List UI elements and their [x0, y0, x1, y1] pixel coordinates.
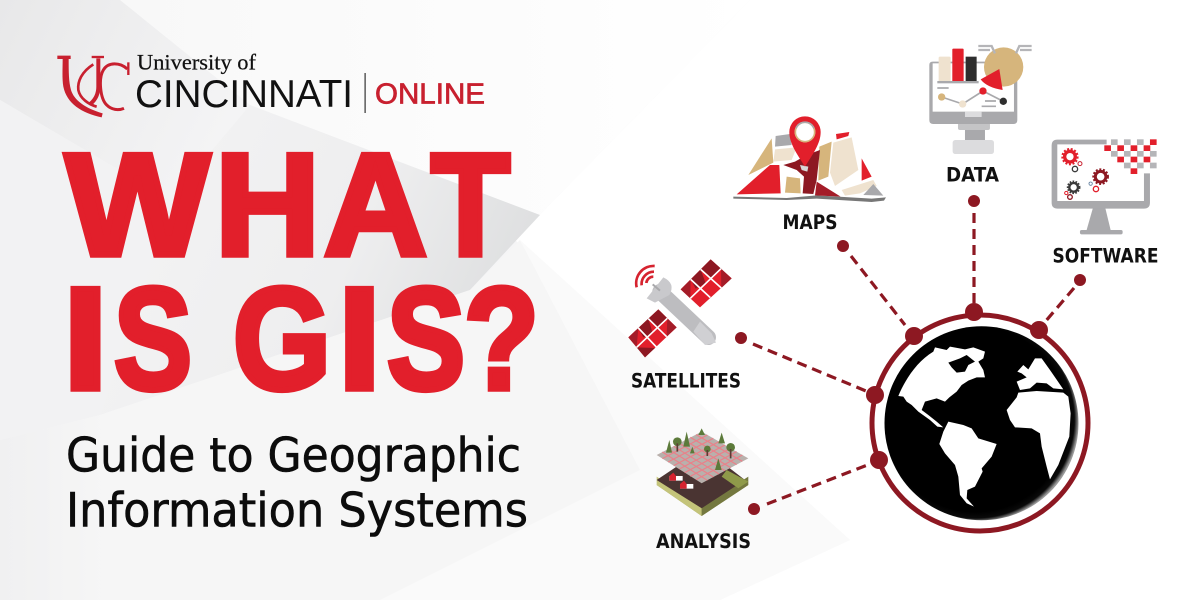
connector end dots: [735, 195, 1086, 515]
bar chart: [939, 57, 951, 82]
label: ANALYSIS: ANALYSIS: [656, 530, 751, 553]
icon: map with pin: [733, 116, 886, 202]
logo divider: [364, 73, 366, 113]
label: DATA: DATA: [946, 164, 999, 187]
orbit ring: [872, 315, 1088, 531]
icon: satellite: [628, 259, 732, 357]
pie chart: [984, 47, 1023, 87]
logo text: University of: University of: [137, 50, 257, 74]
globe with ring: [866, 303, 1088, 531]
logo text: ONLINE: ONLINE: [375, 78, 485, 110]
pie hangers: [978, 46, 1032, 53]
title line 2: G: [233, 258, 331, 420]
icon: data monitor: [929, 46, 1032, 154]
Hudson Bay and Gulf details: [948, 355, 975, 373]
title line 1: H: [215, 124, 320, 286]
title line 1: W: [66, 124, 210, 286]
label: SATELLITES: SATELLITES: [631, 370, 741, 393]
gears: [1062, 149, 1108, 199]
subtitle line 1: Guide to Geographic: [66, 428, 521, 484]
title line 2: S: [114, 258, 192, 420]
label: SOFTWARE: SOFTWARE: [1052, 245, 1158, 268]
title line 2: ?: [464, 258, 539, 420]
trees: [666, 428, 735, 470]
logo text: CINCINNATI: CINCINNATI: [135, 73, 353, 116]
continents: [898, 347, 1071, 507]
icon: UC monogram: [57, 56, 128, 117]
ground layer: [657, 455, 748, 516]
title line 1: A: [324, 124, 427, 286]
logo: University of Cincinnati Online: [57, 50, 485, 117]
title line 2: I: [63, 258, 108, 420]
icon: layered analysis terrain: [657, 428, 748, 516]
dashed connectors: [753, 213, 1074, 504]
pixel checker pattern: [1104, 139, 1157, 174]
subtitle line 2: Information Systems: [66, 484, 528, 538]
satellite body: [660, 292, 708, 337]
title line 2: I: [338, 258, 381, 420]
subtitle: [66, 428, 528, 538]
grid plane: [657, 432, 748, 483]
title: WHAT IS GIS?: [63, 124, 539, 420]
houses: [669, 476, 683, 481]
ring nodes: [866, 303, 1048, 469]
solar panels: [681, 259, 732, 307]
signal arcs: [636, 266, 655, 287]
title line 1: T: [431, 124, 510, 286]
icon: software monitor: [1052, 139, 1157, 234]
title line 2: S: [387, 258, 465, 420]
line chart: [942, 91, 1003, 104]
globe disc: [884, 326, 1078, 520]
label: MAPS: MAPS: [782, 211, 838, 234]
